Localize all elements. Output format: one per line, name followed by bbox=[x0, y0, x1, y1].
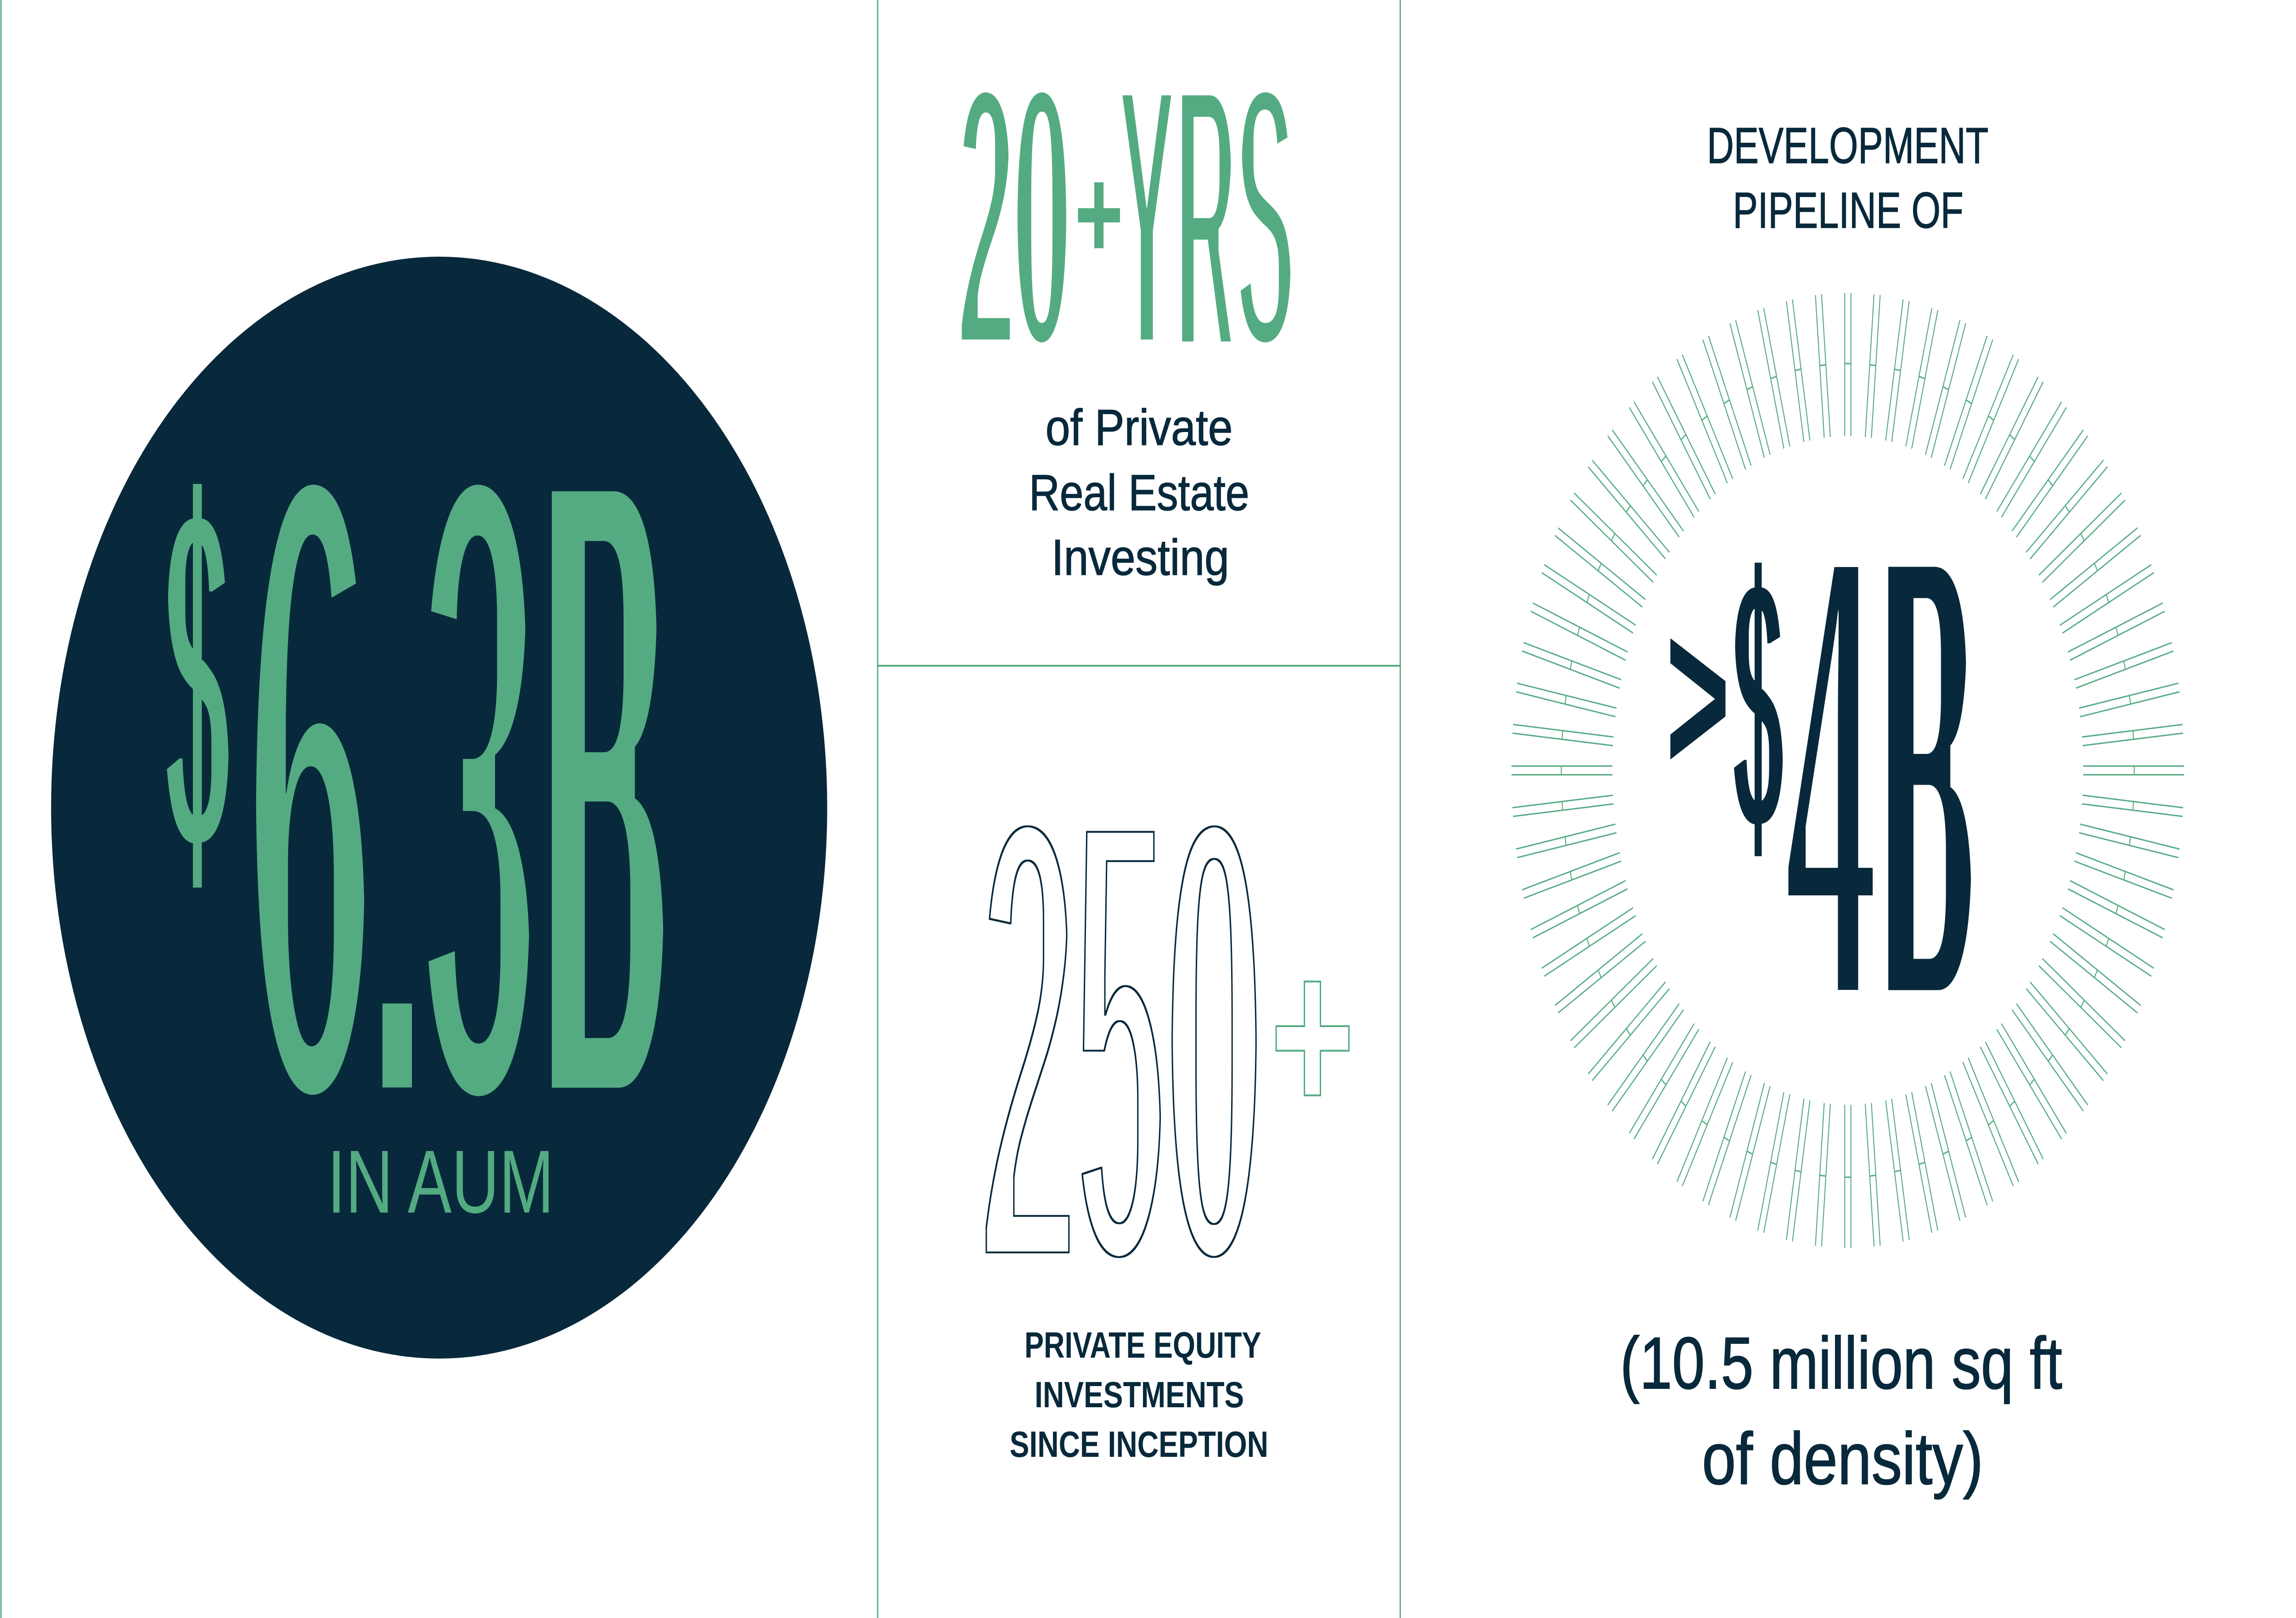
caption: of private real estate investing: of Private bbox=[1046, 400, 1233, 456]
figure: 20+ YRS: 0 bbox=[1013, 2, 1071, 431]
panel: years of investing bbox=[958, 0, 1294, 586]
outlined plus sign: + bbox=[1270, 911, 1355, 1161]
caption: private equity investments since inception: INVESTMENTS bbox=[1035, 1374, 1244, 1415]
figure: 20+ YRS bbox=[958, 0, 1294, 436]
figure: 20+ YRS: R bbox=[1176, 0, 1236, 436]
radial sunburst of double-line rays bbox=[1484, 254, 2212, 1287]
figure: 6.3B: 3 bbox=[421, 266, 537, 1310]
figure: 20+ YRS: S bbox=[1236, 2, 1294, 432]
figure: >$4B bbox=[1666, 400, 1973, 1154]
figure: 250 outlined: 0 bbox=[1165, 669, 1264, 1410]
navy circle bbox=[51, 257, 827, 1359]
figure: >$4B: 4 bbox=[1786, 400, 1875, 1154]
heading: development pipeline of: PIPELINE OF bbox=[1733, 183, 1964, 239]
figure: 20+ YRS: 2 bbox=[958, 2, 1014, 433]
figure: 6.3B: B bbox=[545, 261, 667, 1313]
panel: assets under management bbox=[51, 257, 827, 1359]
figure: 6.3B: . bbox=[368, 578, 426, 1208]
caption: 10.5 million sq ft of density: (10.5 million sq ft bbox=[1620, 1323, 2062, 1405]
caption: of private real estate investing: Real Estate bbox=[1029, 465, 1249, 521]
figure: 20+ YRS: + bbox=[1075, 142, 1123, 286]
heading: development pipeline of bbox=[1707, 118, 1988, 239]
panel: private equity investments bbox=[980, 669, 1355, 1465]
figure: 250 outlined: 2 bbox=[980, 670, 1076, 1413]
caption: 10.5 million sq ft of density bbox=[1620, 1323, 2062, 1500]
caption: private equity investments since inception: PRIVATE EQUITY bbox=[1024, 1324, 1261, 1365]
caption: of private real estate investing: Investing bbox=[1052, 530, 1229, 586]
panel dividers bbox=[0, 0, 1401, 1618]
figure: 6.3B: 6 bbox=[248, 265, 373, 1309]
dollar sign: $ bbox=[165, 385, 229, 974]
figure: >$4B: B bbox=[1884, 400, 1973, 1154]
figure: 250 outlined bbox=[980, 669, 1264, 1413]
caption: 10.5 million sq ft of density: of density) bbox=[1702, 1418, 1983, 1500]
caption: in AUM: IN AUM bbox=[327, 1131, 554, 1232]
figure: >$4B: > bbox=[1666, 570, 1730, 821]
caption: of private real estate investing bbox=[1029, 400, 1249, 586]
heading: development pipeline of: DEVELOPMENT bbox=[1707, 118, 1988, 174]
caption: private equity investments since inception: SINCE INCEPTION bbox=[1010, 1423, 1268, 1465]
figure: 20+ YRS: Y bbox=[1118, 1, 1176, 433]
figure: >$4B: $ bbox=[1733, 494, 1783, 917]
figure: 250 outlined: 5 bbox=[1075, 669, 1165, 1411]
figure: 6.3B bbox=[248, 261, 667, 1313]
caption: private equity investments since inception bbox=[1010, 1324, 1268, 1465]
panel: development pipeline bbox=[1484, 118, 2212, 1500]
